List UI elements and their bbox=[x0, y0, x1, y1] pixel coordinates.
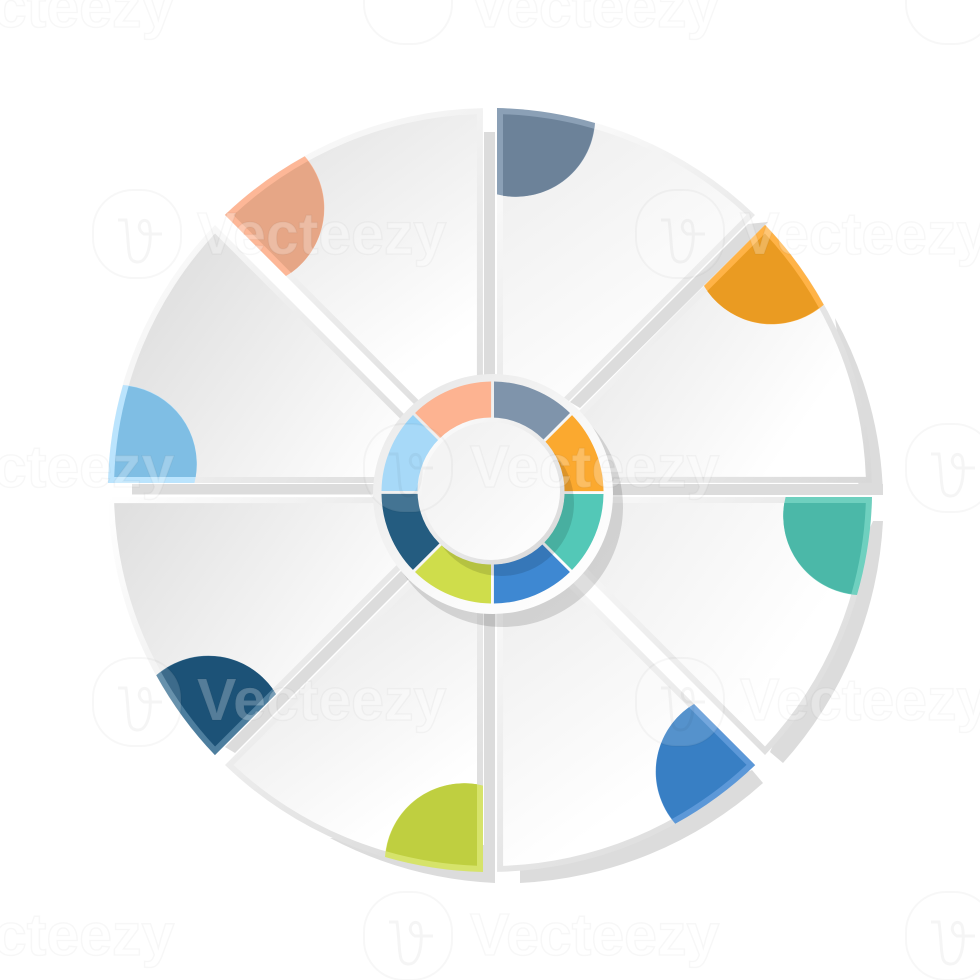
centre hub ring bbox=[359, 359, 626, 626]
watermark overlay: Vecteezy bbox=[470, 902, 719, 968]
watermark overlay: Vecteezy bbox=[197, 667, 446, 733]
panel: segment 3 teal bbox=[507, 497, 872, 755]
panel: segment 8 peach bbox=[225, 33, 665, 473]
watermark overlay: Vecteezy bbox=[470, 434, 719, 500]
panel: segment 2 orange bbox=[507, 225, 947, 665]
panel: segment 7 sky blue bbox=[108, 225, 473, 483]
centre hub shadow bbox=[383, 387, 623, 627]
sector drop shadows bbox=[132, 132, 883, 883]
inner disc shadow bbox=[428, 430, 574, 576]
inner disc bbox=[418, 418, 564, 564]
panel: segment 1 slate bbox=[497, 108, 755, 473]
panel: segment 6 navy bbox=[33, 315, 473, 755]
colour ring segments bbox=[359, 359, 626, 626]
panel: segment 5 lime bbox=[225, 507, 483, 872]
watermark overlay: Vecteezy bbox=[197, 201, 446, 267]
panel: segment 4 blue bbox=[315, 507, 755, 947]
